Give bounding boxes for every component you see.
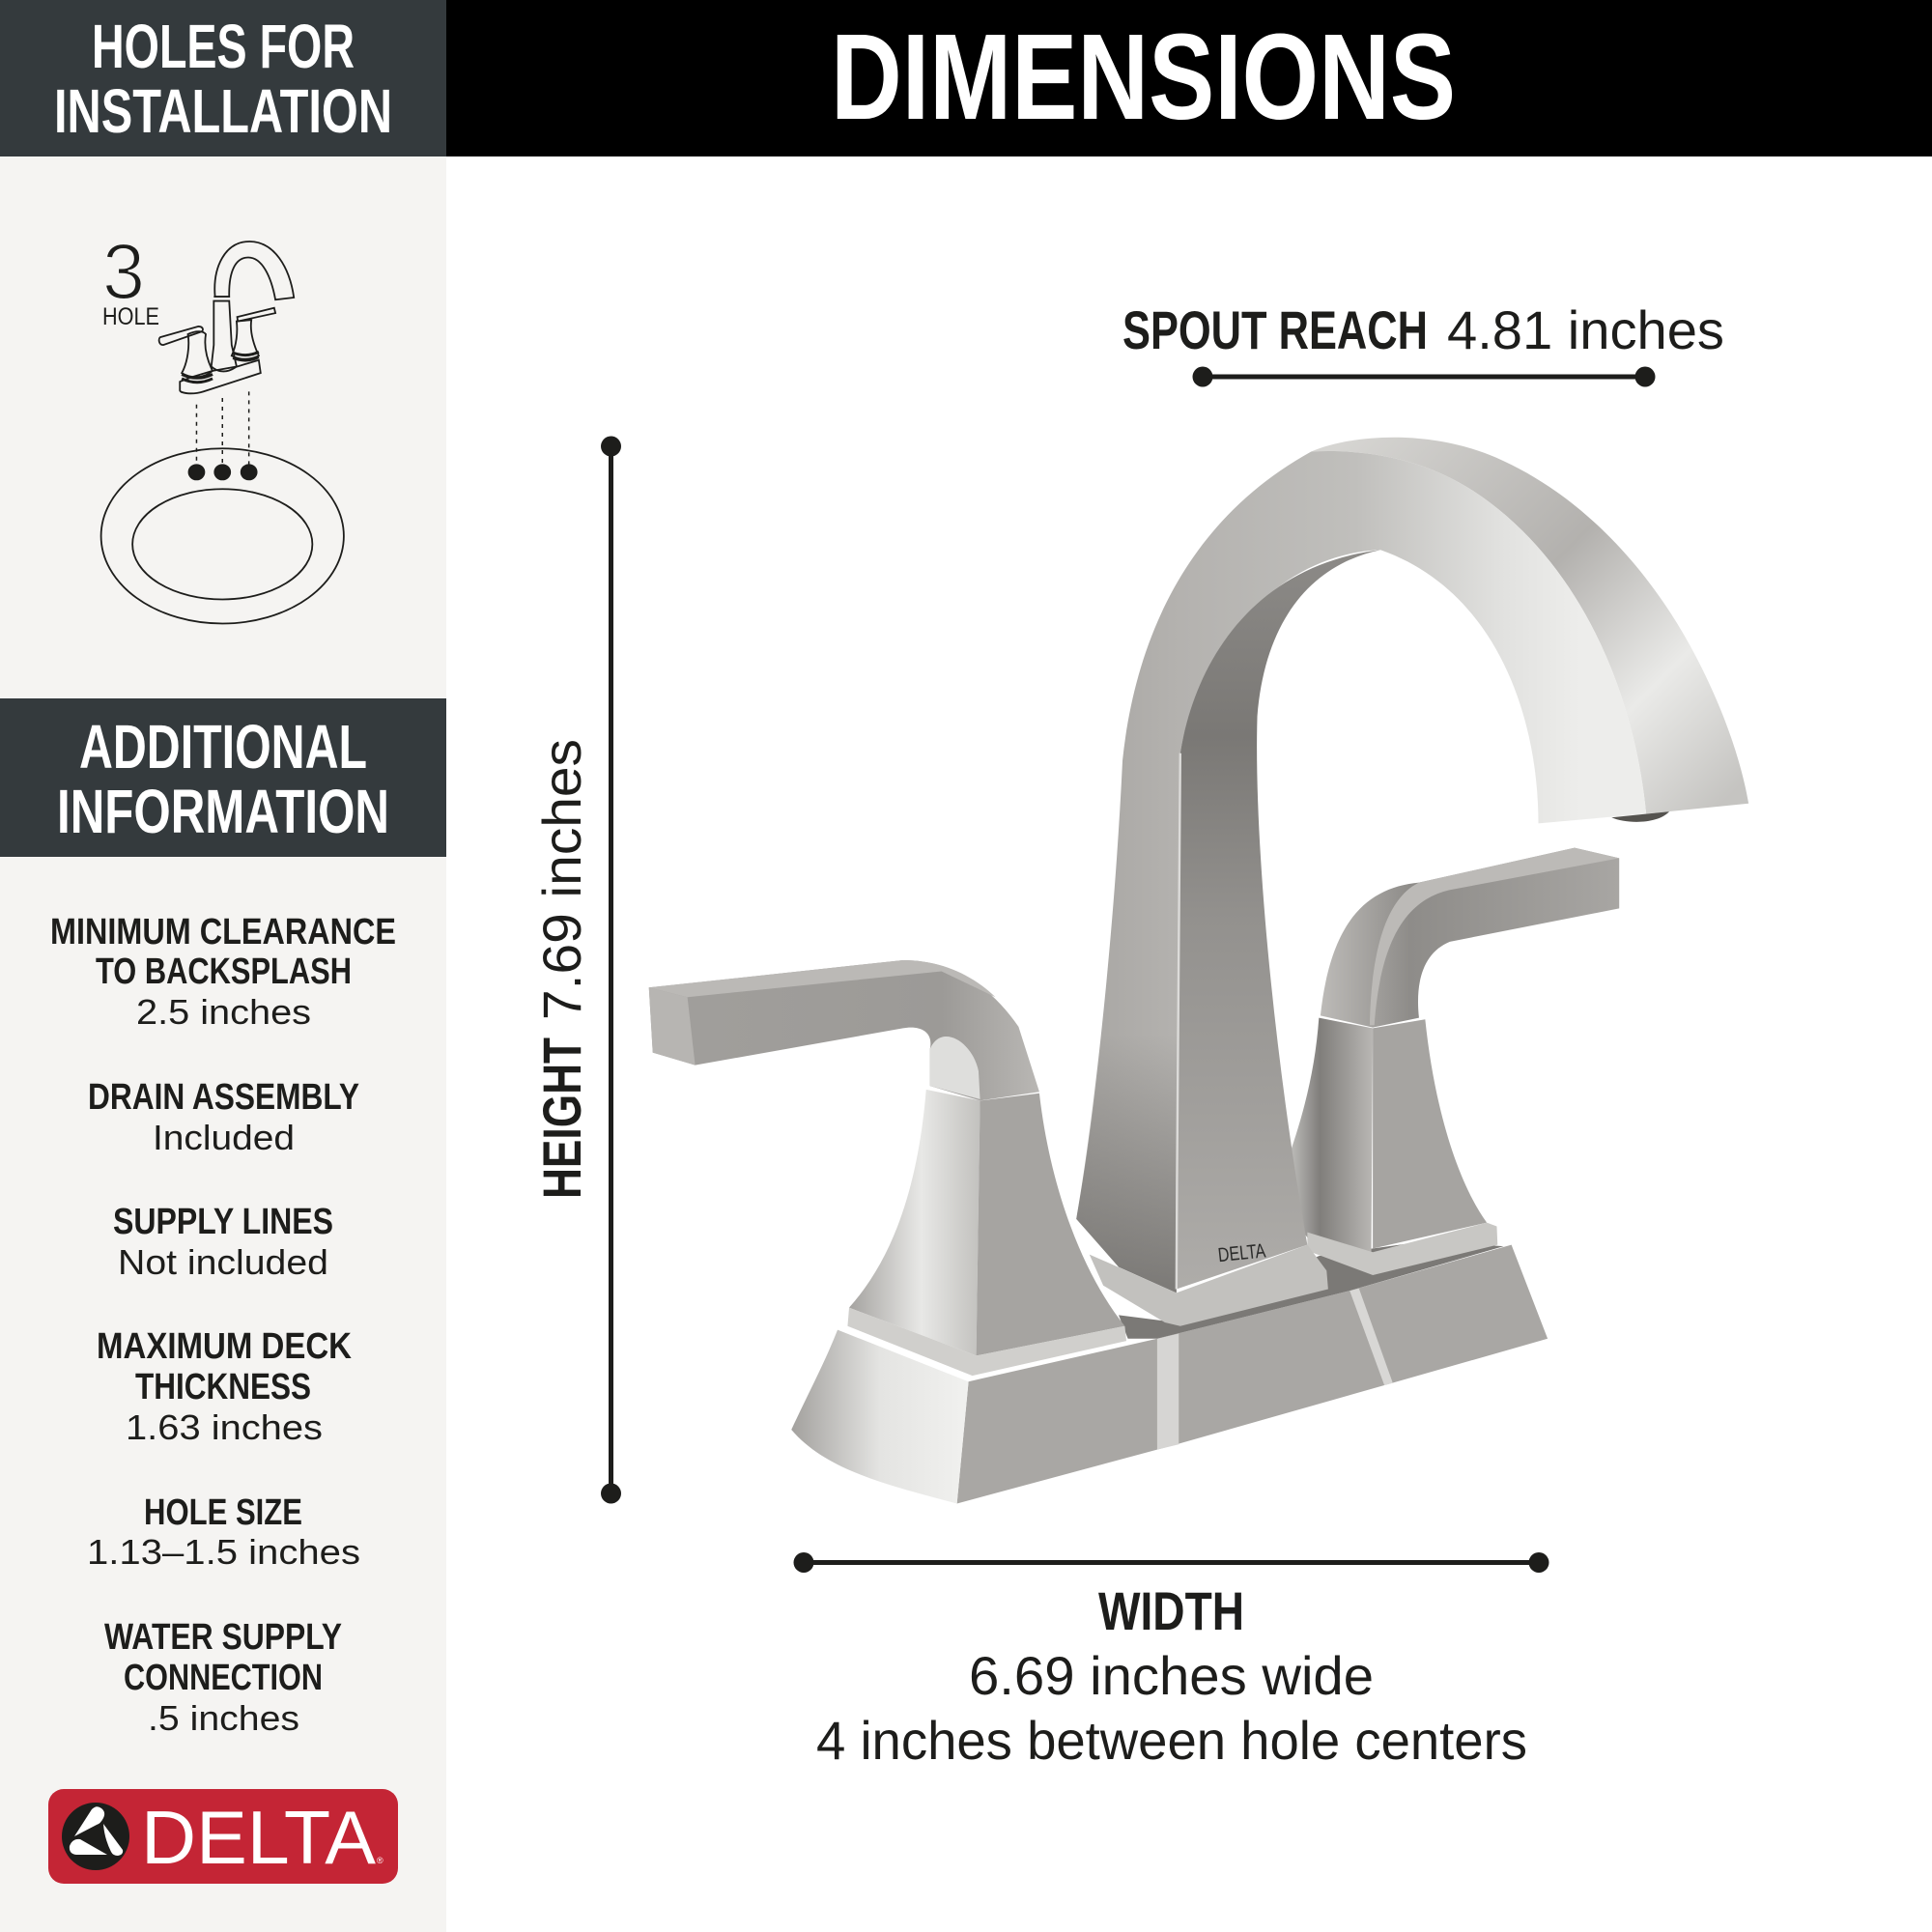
sidebar panel [0, 0, 446, 1932]
header: holes for installation [0, 0, 446, 156]
sink outline [101, 448, 344, 623]
spec: supply lines: SUPPLY LINES [113, 1202, 333, 1242]
spec: drain assembly: DRAIN ASSEMBLY [88, 1077, 359, 1118]
header: additional information: INFORMATION [57, 777, 389, 846]
right handle lever [1321, 848, 1619, 1028]
spec: water supply connection [104, 1617, 342, 1738]
dimension: height: HEIGHT [531, 1037, 592, 1199]
spec: minimum clearance [50, 912, 396, 1032]
spec: water supply connection: CONNECTION [124, 1658, 323, 1698]
spout arch [1076, 438, 1748, 1293]
spout inner face [1177, 550, 1380, 1290]
dimension: width: WIDTH [1098, 1580, 1244, 1641]
faucet line drawing [159, 242, 294, 393]
icon: three hole faucet and sink: HOLE [102, 303, 159, 330]
spec: minimum clearance: 2.5 inches [136, 992, 311, 1032]
title banner [446, 0, 1932, 156]
dimension: height [531, 437, 621, 1503]
logo: Delta: ® [377, 1856, 384, 1865]
dimension: spout reach [1122, 299, 1724, 386]
spec: maximum deck thickness: THICKNESS [135, 1367, 311, 1407]
faucet product image [649, 438, 1748, 1503]
spec: supply lines: Not included [118, 1242, 328, 1282]
spec: maximum deck thickness [97, 1326, 352, 1447]
left handle lever [649, 960, 1039, 1100]
spec: supply lines [113, 1202, 333, 1282]
dimension: spout reach: SPOUT REACH [1122, 299, 1428, 360]
header: additional information [0, 698, 446, 857]
dimension: spout reach: 4.81 inches [1447, 299, 1724, 360]
dimension: width: 6.69 inches wide [969, 1645, 1374, 1706]
faucet brand mark: DELTA [1217, 1240, 1267, 1266]
header: holes for installation: HOLES FOR [92, 12, 355, 81]
spout collar [1090, 1245, 1328, 1326]
dotted guide lines [196, 391, 249, 465]
spec: water supply connection: WATER SUPPLY [104, 1617, 342, 1658]
dimension: width [794, 1552, 1549, 1771]
header: additional information: ADDITIONAL [79, 712, 367, 781]
spec: maximum deck thickness: MAXIMUM DECK [97, 1326, 352, 1367]
spec: minimum clearance: MINIMUM CLEARANCE [50, 912, 396, 952]
spout aerator [1611, 811, 1669, 822]
spout edge highlight [1177, 753, 1180, 1290]
header: holes for installation: INSTALLATION [54, 76, 392, 146]
spec: drain assembly: Included [153, 1118, 295, 1157]
dimension: height: 7.69 inches [531, 739, 592, 1020]
spec: minimum clearance: TO BACKSPLASH [96, 952, 352, 992]
spec: drain assembly [88, 1077, 359, 1157]
right handle base [1285, 1018, 1497, 1275]
spec: hole size: HOLE SIZE [144, 1492, 302, 1533]
left handle base [847, 1090, 1126, 1376]
spec: hole size [87, 1492, 360, 1572]
title banner: DIMENSIONS [831, 9, 1456, 145]
deck plate [791, 1241, 1548, 1503]
dimension: width: 4 inches between hole centers [816, 1710, 1527, 1771]
spec: water supply connection: .5 inches [148, 1698, 299, 1738]
icon: three hole faucet and sink [101, 228, 344, 623]
logo: Delta [48, 1789, 398, 1884]
spec: maximum deck thickness: 1.63 inches [126, 1407, 323, 1447]
logo: Delta: DELTA [141, 1795, 376, 1880]
icon: three hole faucet and sink: 3 [102, 228, 145, 316]
spec: hole size: 1.13–1.5 inches [87, 1532, 360, 1572]
